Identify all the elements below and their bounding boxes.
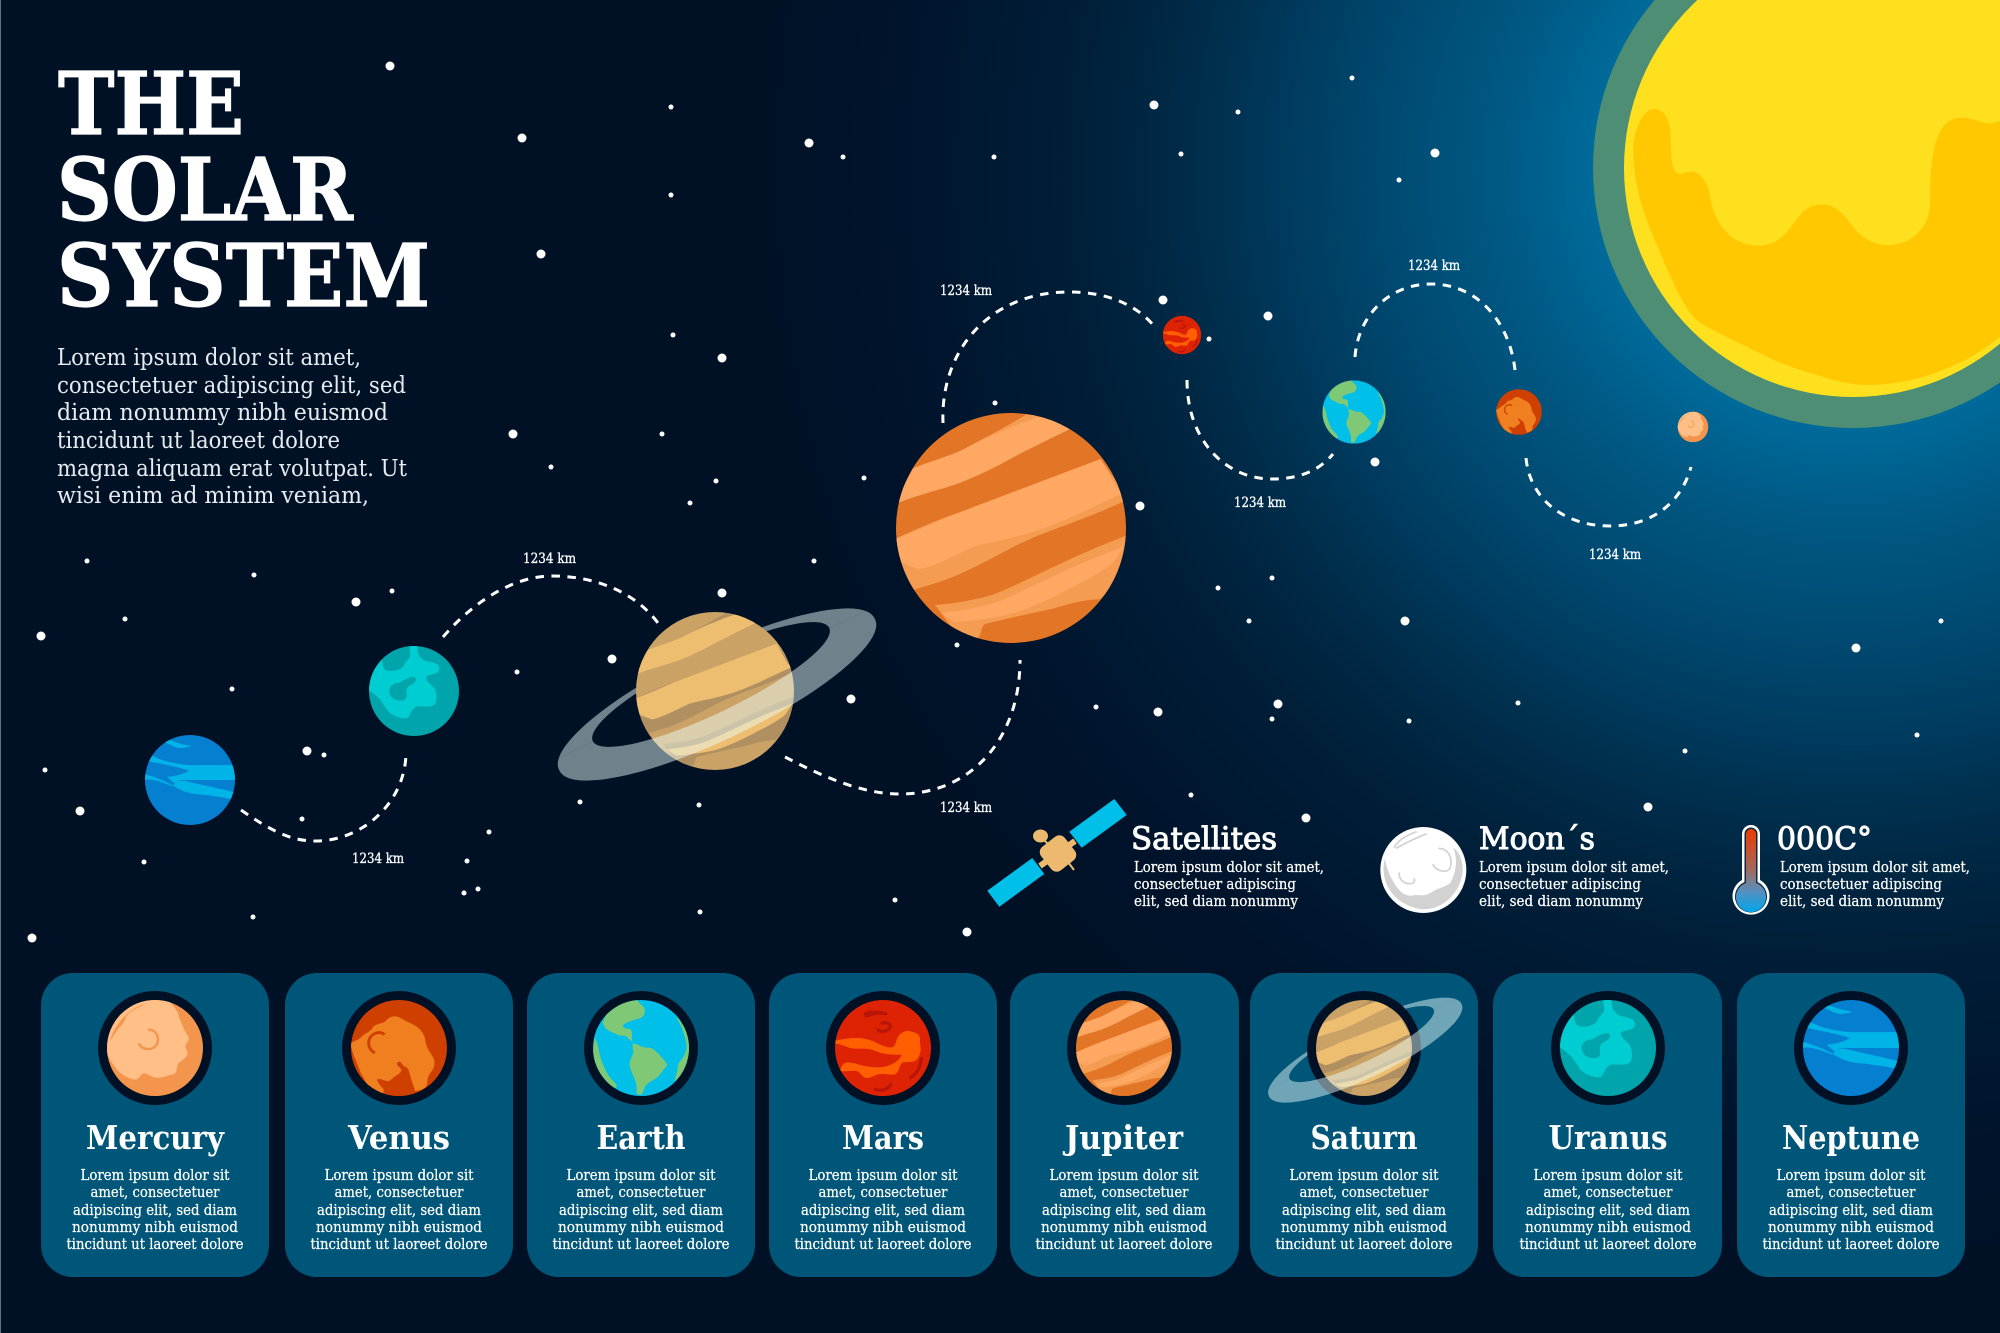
text: Neptune description: adipiscing elit, sed diam bbox=[1769, 1203, 1933, 1219]
title bbox=[57, 54, 430, 327]
text: moons description bbox=[1479, 860, 1669, 910]
icon: Saturn bbox=[1268, 991, 1462, 1105]
text: Venus description bbox=[310, 1168, 488, 1253]
orbit path: Mars to Earth bbox=[1187, 380, 1333, 479]
text: temperature description: Lorem ipsum dolor sit amet, bbox=[1780, 860, 1970, 876]
orbit path: Saturn to Jupiter bbox=[785, 660, 1020, 794]
heading: Jupiter: Jupiter bbox=[1062, 1118, 1184, 1157]
title: SYSTEM bbox=[57, 226, 430, 327]
orbit path: Venus to Mercury bbox=[1526, 458, 1691, 526]
intro paragraph: wisi enim ad minim veniam, bbox=[57, 483, 369, 509]
intro paragraph: consectetuer adipiscing elit, sed bbox=[57, 373, 406, 399]
text: moons description: elit, sed diam nonummy bbox=[1479, 894, 1644, 910]
text: Earth description: Lorem ipsum dolor sit bbox=[566, 1168, 716, 1184]
distance label: 1234 km bbox=[1408, 258, 1460, 274]
text: Earth description: adipiscing elit, sed diam bbox=[559, 1203, 723, 1219]
text: Neptune description: tincidunt ut laoreet dolore bbox=[1762, 1237, 1940, 1253]
panel: Mercury bbox=[41, 973, 269, 1277]
panel: Uranus bbox=[1493, 973, 1722, 1277]
panel: Earth bbox=[527, 973, 755, 1277]
icon: thermometer bbox=[1732, 825, 1770, 915]
heading: Neptune: Neptune bbox=[1782, 1118, 1920, 1157]
orbit path: Jupiter to Mars bbox=[943, 292, 1155, 423]
orbit path: Earth to Venus bbox=[1355, 284, 1515, 370]
planet: Uranus bbox=[368, 645, 459, 736]
text: moons description: consectetuer adipiscing bbox=[1479, 877, 1641, 893]
panel: Neptune bbox=[1737, 973, 1965, 1277]
icon: Uranus bbox=[1551, 991, 1665, 1105]
text: satellites description bbox=[1134, 860, 1324, 910]
icon: Jupiter bbox=[1067, 991, 1181, 1105]
distance label: 1234 km bbox=[940, 800, 992, 816]
text: Mars description bbox=[794, 1168, 972, 1253]
title: SOLAR bbox=[57, 140, 353, 241]
text: Neptune description: Lorem ipsum dolor sit bbox=[1776, 1168, 1926, 1184]
heading: Saturn: Saturn bbox=[1310, 1118, 1418, 1157]
icon: moon bbox=[1380, 827, 1466, 913]
planet: Jupiter bbox=[894, 413, 1128, 645]
intro paragraph: magna aliquam erat volutpat. Ut bbox=[57, 456, 408, 482]
distance label: 1234 km bbox=[940, 283, 992, 299]
orbit path: Neptune to Uranus bbox=[241, 752, 406, 841]
text: Saturn description: amet, consectetuer bbox=[1300, 1185, 1429, 1201]
text: Jupiter description: tincidunt ut laoreet dolore bbox=[1036, 1237, 1212, 1253]
icon: Neptune bbox=[1794, 991, 1908, 1105]
heading: Mercury: Mercury bbox=[86, 1118, 225, 1157]
intro paragraph bbox=[57, 345, 408, 509]
text: Mars description: amet, consectetuer bbox=[818, 1185, 948, 1201]
distance label: 1234 km bbox=[523, 551, 576, 567]
text: Jupiter description: amet, consectetuer bbox=[1060, 1185, 1189, 1201]
text: Saturn description bbox=[1276, 1168, 1452, 1253]
distance label: 1234 km bbox=[1589, 547, 1641, 563]
text: satellites description: elit, sed diam nonummy bbox=[1134, 894, 1299, 910]
text: temperature description bbox=[1780, 860, 1970, 910]
orbit path: Uranus to Saturn bbox=[443, 576, 658, 637]
heading: Satellites: Satellites bbox=[1131, 821, 1277, 857]
sun bbox=[1593, 0, 2000, 428]
text: Venus description: tincidunt ut laoreet dolore bbox=[310, 1237, 488, 1253]
text: Jupiter description: nonummy nibh euismod bbox=[1041, 1220, 1207, 1236]
text: Earth description bbox=[552, 1168, 730, 1253]
text: Earth description: tincidunt ut laoreet dolore bbox=[552, 1237, 730, 1253]
text: Mars description: Lorem ipsum dolor sit bbox=[808, 1168, 958, 1184]
text: Saturn description: adipiscing elit, sed diam bbox=[1282, 1203, 1446, 1219]
heading: Moon´s: Moon´s bbox=[1479, 821, 1595, 857]
panel: Mars bbox=[769, 973, 997, 1277]
text: Neptune description: amet, consectetuer bbox=[1786, 1185, 1916, 1201]
panel: Jupiter bbox=[1010, 973, 1239, 1277]
legend: moons bbox=[1380, 821, 1669, 913]
text: Neptune description: nonummy nibh euismod bbox=[1768, 1220, 1934, 1236]
text: Uranus description bbox=[1520, 1168, 1696, 1253]
legend: satellites bbox=[987, 799, 1324, 910]
planet: Mercury bbox=[1677, 411, 1708, 442]
text: temperature description: consectetuer adipiscing bbox=[1780, 877, 1942, 893]
text: Mars description: tincidunt ut laoreet dolore bbox=[794, 1237, 972, 1253]
icon: satellite bbox=[987, 799, 1127, 907]
heading: Earth: Earth bbox=[596, 1118, 686, 1157]
intro paragraph: tincidunt ut laoreet dolore bbox=[57, 428, 340, 454]
text: temperature description: elit, sed diam nonummy bbox=[1780, 894, 1945, 910]
legend: temperature bbox=[1732, 821, 1970, 915]
text: Uranus description: nonummy nibh euismod bbox=[1525, 1220, 1691, 1236]
panel: Saturn bbox=[1250, 973, 1478, 1277]
planet: Venus bbox=[1496, 389, 1542, 435]
heading: temperature: 000C° bbox=[1777, 821, 1872, 857]
planet: Mars bbox=[1162, 316, 1201, 354]
text: Venus description: Lorem ipsum dolor sit bbox=[324, 1168, 474, 1184]
text: Mercury description: adipiscing elit, sed diam bbox=[73, 1203, 237, 1219]
intro paragraph: diam nonummy nibh euismod bbox=[57, 400, 388, 426]
icon: Mars bbox=[826, 991, 940, 1105]
text: Uranus description: adipiscing elit, sed diam bbox=[1526, 1203, 1690, 1219]
distance label: 1234 km bbox=[1234, 495, 1286, 511]
planet: Earth bbox=[1322, 380, 1386, 444]
text: Venus description: nonummy nibh euismod bbox=[316, 1220, 482, 1236]
text: Earth description: nonummy nibh euismod bbox=[558, 1220, 724, 1236]
text: Saturn description: nonummy nibh euismod bbox=[1281, 1220, 1447, 1236]
text: Jupiter description bbox=[1036, 1168, 1212, 1253]
text: Mercury description: amet, consectetuer bbox=[90, 1185, 220, 1201]
text: Mars description: adipiscing elit, sed diam bbox=[801, 1203, 965, 1219]
text: Saturn description: tincidunt ut laoreet dolore bbox=[1276, 1237, 1452, 1253]
text: Jupiter description: adipiscing elit, sed diam bbox=[1042, 1203, 1206, 1219]
text: satellites description: consectetuer adipiscing bbox=[1134, 877, 1296, 893]
text: Uranus description: tincidunt ut laoreet dolore bbox=[1520, 1237, 1696, 1253]
distance label: 1234 km bbox=[352, 851, 404, 867]
text: Jupiter description: Lorem ipsum dolor sit bbox=[1050, 1168, 1199, 1184]
text: Mercury description: nonummy nibh euismod bbox=[72, 1220, 238, 1236]
heading: Mars: Mars bbox=[842, 1118, 924, 1157]
planet: Saturn bbox=[558, 608, 876, 781]
heading: Uranus: Uranus bbox=[1548, 1118, 1668, 1157]
text: Venus description: amet, consectetuer bbox=[334, 1185, 464, 1201]
icon: Mercury bbox=[98, 991, 212, 1105]
text: moons description: Lorem ipsum dolor sit amet, bbox=[1479, 860, 1669, 876]
text: Uranus description: amet, consectetuer bbox=[1544, 1185, 1673, 1201]
text: Mercury description bbox=[66, 1168, 244, 1253]
text: Mercury description: tincidunt ut laoreet dolore bbox=[66, 1237, 244, 1253]
text: Neptune description bbox=[1762, 1168, 1940, 1253]
text: Uranus description: Lorem ipsum dolor sit bbox=[1534, 1168, 1683, 1184]
planet: Neptune bbox=[144, 735, 236, 825]
text: Venus description: adipiscing elit, sed diam bbox=[317, 1203, 481, 1219]
intro paragraph: Lorem ipsum dolor sit amet, bbox=[57, 345, 361, 371]
text: Mars description: nonummy nibh euismod bbox=[800, 1220, 966, 1236]
text: satellites description: Lorem ipsum dolor sit amet, bbox=[1134, 860, 1324, 876]
icon: Earth bbox=[584, 991, 698, 1105]
heading: Venus: Venus bbox=[347, 1118, 450, 1157]
text: Earth description: amet, consectetuer bbox=[576, 1185, 706, 1201]
panel: Venus bbox=[285, 973, 513, 1277]
text: Mercury description: Lorem ipsum dolor sit bbox=[80, 1168, 230, 1184]
title: THE bbox=[58, 54, 244, 155]
starfield bbox=[28, 62, 1944, 942]
icon: Venus bbox=[342, 991, 456, 1105]
text: Saturn description: Lorem ipsum dolor sit bbox=[1290, 1168, 1439, 1184]
